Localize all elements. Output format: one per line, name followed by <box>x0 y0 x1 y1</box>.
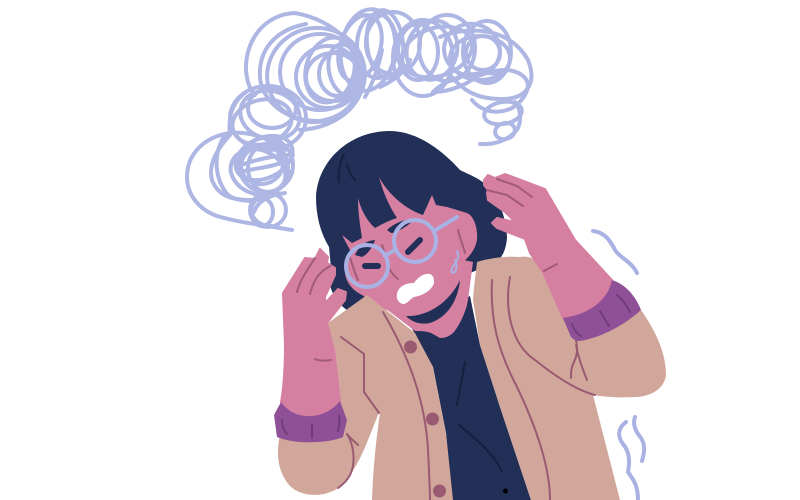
shirt dot <box>503 488 508 494</box>
hair strands <box>339 154 355 182</box>
closed eyes <box>365 240 420 266</box>
right finger lines <box>487 179 557 271</box>
icon: tangled thought scribble <box>187 6 531 230</box>
right cuff ribs <box>572 295 630 336</box>
left sleeve <box>278 340 382 495</box>
left cardigan panel <box>328 295 453 500</box>
face creases <box>350 230 465 280</box>
right cardigan panel <box>473 257 666 500</box>
right cuff <box>563 280 641 341</box>
eyebrows <box>355 219 415 257</box>
sweat drop <box>451 251 458 273</box>
face <box>342 177 477 316</box>
shirt <box>410 296 531 500</box>
collar shadow <box>406 280 460 324</box>
glasses <box>346 217 457 287</box>
left cuff ribs <box>282 416 339 438</box>
mouth <box>397 274 434 304</box>
right hand and forearm <box>484 174 612 318</box>
cardigan seams <box>338 277 595 500</box>
cardigan buttons <box>404 340 446 498</box>
shake lines near hip <box>619 417 644 500</box>
shirt creases <box>457 362 502 472</box>
left hand and forearm <box>281 249 346 416</box>
shake lines near arm <box>593 231 637 273</box>
left finger lines <box>297 258 331 361</box>
neck <box>365 258 473 338</box>
left cuff <box>274 401 347 442</box>
hair <box>316 131 507 320</box>
